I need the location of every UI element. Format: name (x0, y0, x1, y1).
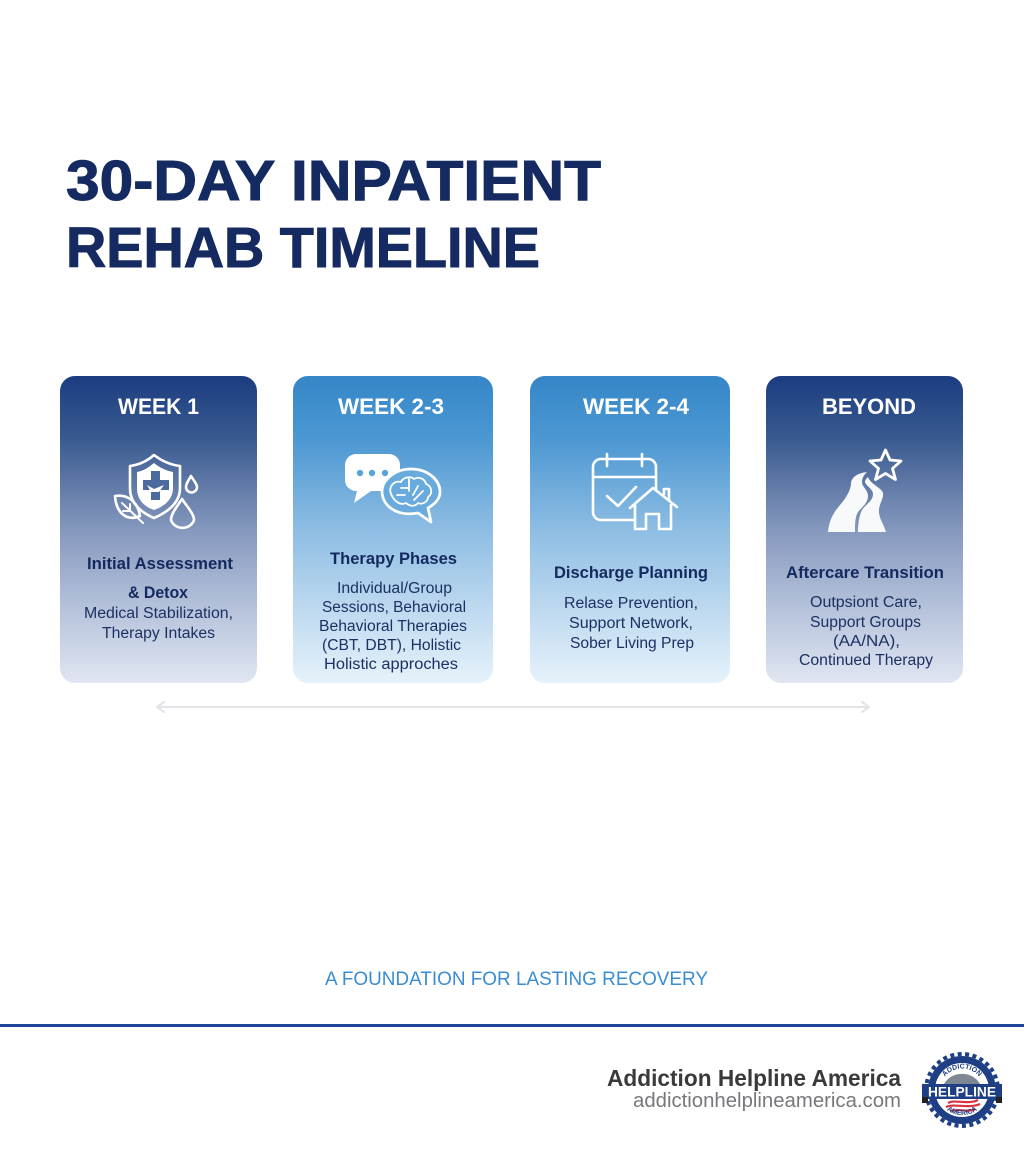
icon: calendar with house (593, 454, 677, 529)
logo: helpline badge (922, 1052, 1002, 1128)
week 2-3 description: Holistic approches (324, 656, 458, 673)
week 2-4 heading: WEEK 2-4 (583, 394, 689, 419)
logo: helpline badge: AMERICA (946, 1106, 978, 1116)
icon: winding road to star (828, 450, 901, 532)
week 2-4 description: Relase Prevention, (564, 595, 698, 612)
aftercare transition heading: Aftercare Transition (786, 564, 944, 582)
title (66, 149, 601, 280)
footer brand text: addictionhelplineamerica.com (633, 1090, 901, 1112)
week 1 description (84, 605, 233, 642)
week 2-3 heading: WEEK 2-3 (338, 394, 444, 419)
week 2-3 description: Behavioral Therapies (319, 618, 467, 635)
initial assessment heading (87, 555, 234, 602)
icon: shield with cross, leaf and drops (115, 455, 197, 528)
panel: week 2-3 (293, 376, 493, 683)
logo: helpline badge: HELPLINE (928, 1084, 996, 1100)
panel: week 2-4 (530, 376, 730, 683)
week 2-4 description (564, 595, 698, 652)
beyond description: (AA/NA), (833, 633, 900, 650)
panel: beyond (766, 376, 963, 683)
footer brand text (607, 1065, 901, 1112)
tagline: A FOUNDATION FOR LASTING RECOVERY (325, 969, 708, 990)
week 1 description: Medical Stabilization, (84, 605, 233, 622)
icon: speech bubble and brain (345, 454, 440, 522)
beyond heading: BEYOND (822, 394, 916, 419)
week 2-3 description (319, 580, 467, 673)
footer brand text: Addiction Helpline America (607, 1065, 901, 1091)
logo: helpline badge: ADDICTION (942, 1064, 982, 1076)
week 2-3 description: Sessions, Behavioral (322, 599, 466, 616)
week 2-4 description: Support Network, (569, 615, 693, 632)
initial assessment heading: Initial Assessment (87, 555, 234, 573)
week 2-4 description: Sober Living Prep (570, 635, 694, 652)
week 1 heading: WEEK 1 (118, 394, 199, 419)
panel: week 1 (60, 376, 257, 683)
therapy phases heading: Therapy Phases (330, 550, 457, 568)
beyond description (799, 594, 933, 669)
arrow: timeline direction (157, 702, 869, 712)
beyond description: Outpsiont Care, (810, 594, 922, 611)
discharge planning heading: Discharge Planning (554, 564, 708, 582)
beyond description: Continued Therapy (799, 652, 933, 669)
beyond description: Support Groups (810, 614, 921, 631)
title: 30-DAY INPATIENT (66, 149, 601, 213)
week 2-3 description: Individual/Group (337, 580, 452, 597)
week 1 description: Therapy Intakes (102, 625, 215, 642)
title: REHAB TIMELINE (66, 216, 540, 280)
initial assessment heading: & Detox (128, 584, 189, 602)
week 2-3 description: (CBT, DBT), Holistic (322, 637, 461, 654)
